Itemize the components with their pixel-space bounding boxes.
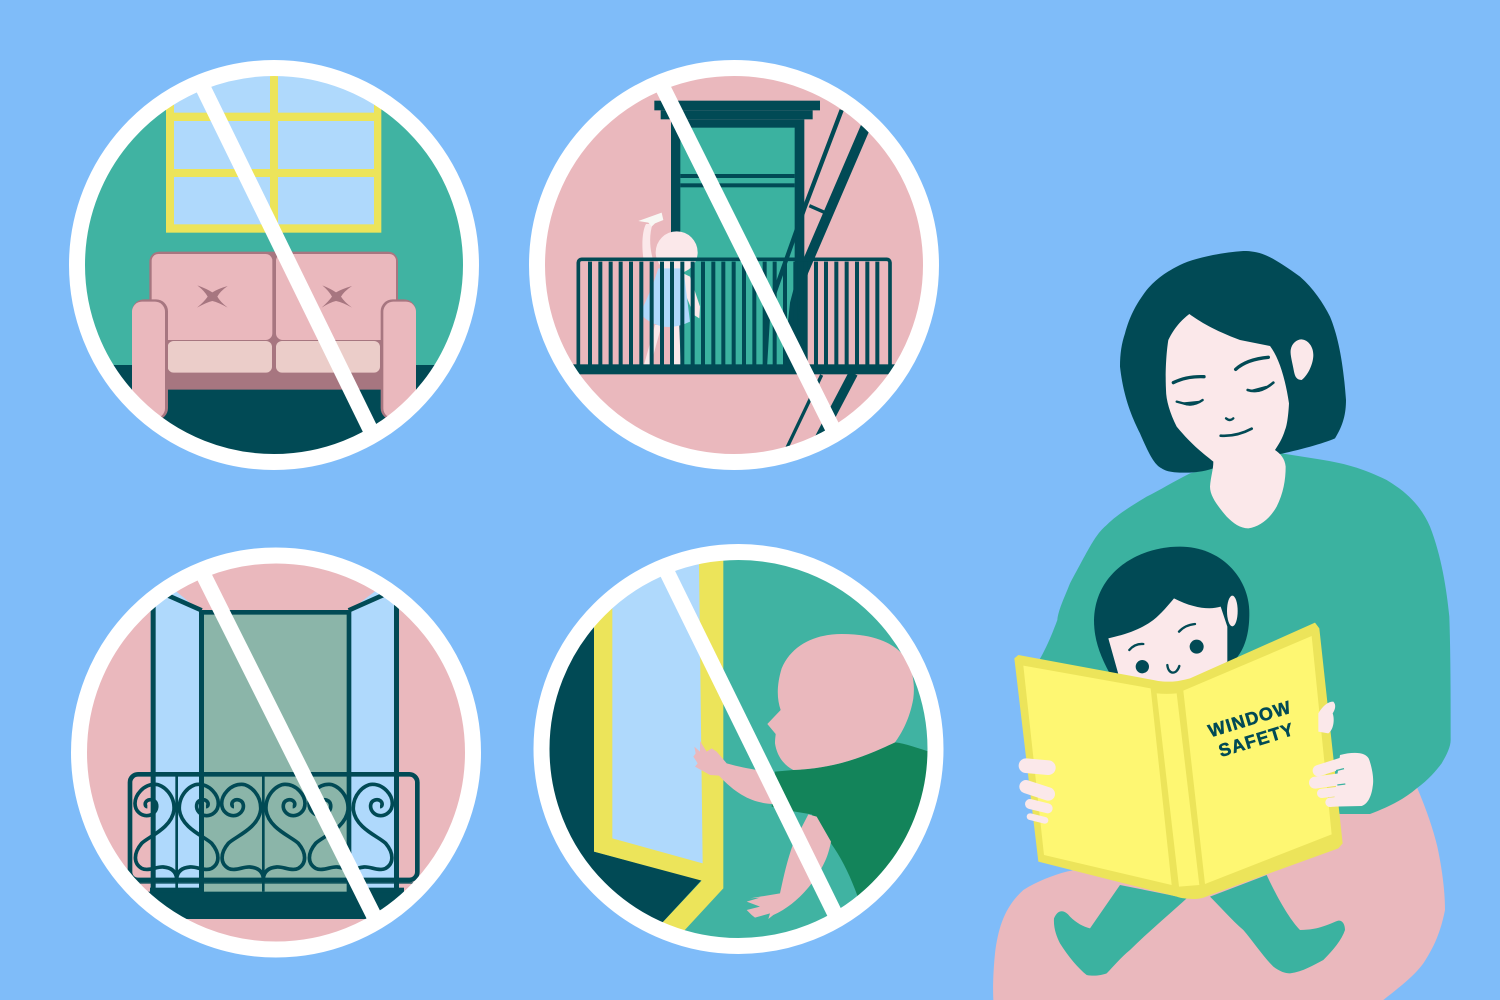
child's facial features bbox=[1129, 624, 1204, 673]
mother's hair bbox=[1120, 251, 1346, 473]
prohibition ring and slash bbox=[537, 68, 931, 462]
prohibition ring and slash bbox=[542, 552, 936, 946]
baby shirt bbox=[772, 742, 932, 898]
mother's left hand bbox=[1026, 766, 1048, 820]
window bbox=[166, 70, 381, 233]
child's legs bbox=[1054, 875, 1345, 976]
window frame and glass bbox=[594, 535, 723, 932]
prohibition ring and slash bbox=[77, 68, 471, 462]
child's ear bbox=[1227, 596, 1238, 626]
mother's facial features bbox=[1173, 357, 1273, 436]
mother's sweater bbox=[1038, 453, 1451, 814]
prohibition ring and slash bbox=[79, 556, 473, 950]
sofa bbox=[132, 252, 416, 420]
railing bbox=[570, 259, 903, 374]
illustration: mother reading window safety book to child bbox=[993, 251, 1451, 1000]
panel: juliet balcony bbox=[60, 535, 490, 965]
child with paper plane bbox=[638, 213, 700, 365]
open window bbox=[140, 585, 410, 919]
baby arm and hand on floor bbox=[747, 814, 831, 919]
panel: baby reaching for window bbox=[525, 535, 955, 965]
ornate railing bbox=[130, 774, 417, 892]
child's hair bbox=[1094, 547, 1249, 687]
book title: WINDOW bbox=[1206, 697, 1294, 741]
panel: child on fire escape bbox=[520, 50, 950, 480]
book bbox=[1014, 623, 1343, 899]
door with cornice bbox=[654, 101, 820, 365]
panel: no climbing on sofa by window bbox=[60, 50, 490, 480]
mother's right hand bbox=[1315, 753, 1373, 807]
mother's face and neck bbox=[1166, 314, 1289, 528]
mother's lap bbox=[993, 787, 1445, 1000]
dark room side bbox=[550, 627, 701, 922]
small fingers over book edge bbox=[1318, 702, 1335, 733]
fire escape ladder bbox=[765, 110, 866, 448]
baby arm and hand on glass bbox=[693, 741, 773, 804]
child's face bbox=[1108, 598, 1227, 688]
baby head bbox=[767, 634, 914, 770]
book title bbox=[1206, 697, 1297, 761]
mother's ear bbox=[1291, 339, 1313, 380]
book title: SAFETY bbox=[1216, 719, 1297, 761]
